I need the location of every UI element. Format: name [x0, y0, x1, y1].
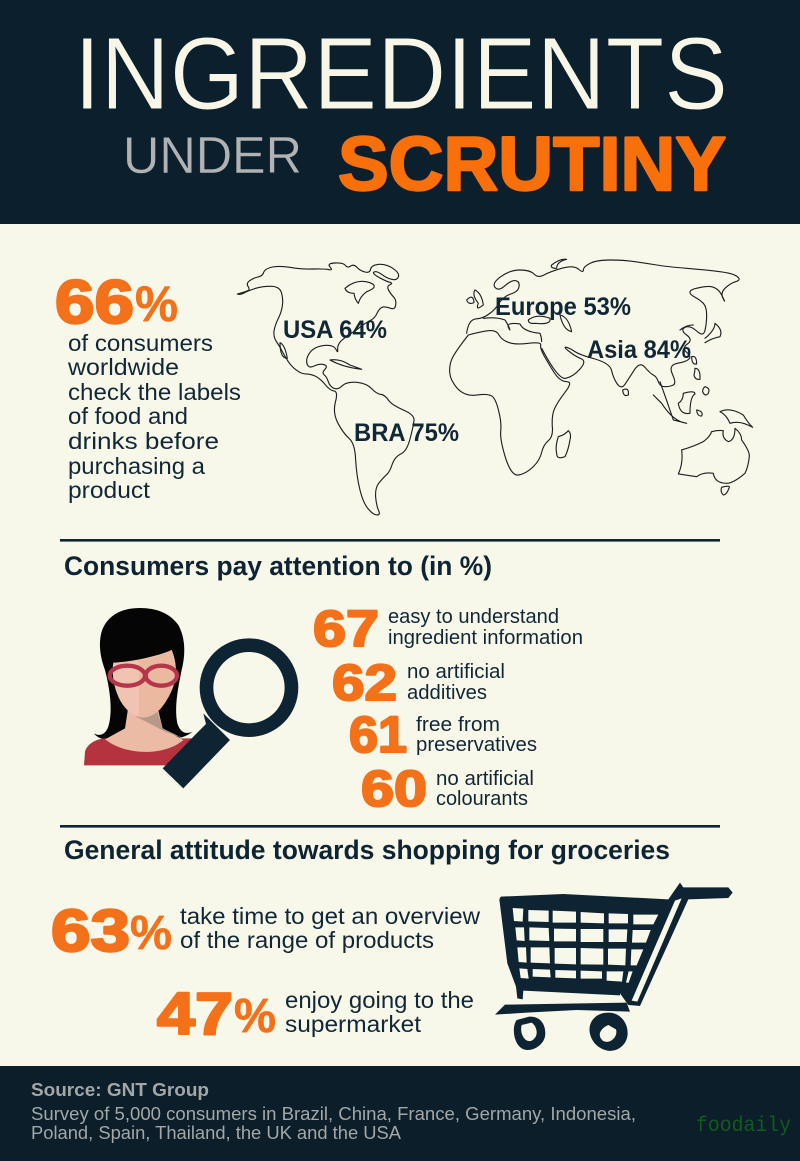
- stat: 63% take time: of the range of products: [180, 927, 434, 953]
- stat: 63% take time: take time to get an overview: [180, 903, 481, 929]
- neck shadow: [135, 712, 183, 738]
- stat 62: [332, 654, 505, 711]
- stat number 66%: 66: [55, 268, 134, 336]
- cart body: [499, 883, 733, 1006]
- section heading: consumers pay attention: Consumers pay attention to (in %): [64, 551, 492, 581]
- neck and chest: [105, 707, 183, 752]
- top: [84, 738, 194, 765]
- hair: [94, 608, 193, 740]
- stat 61: free from: [416, 713, 500, 736]
- stat 62: 62: [332, 654, 397, 711]
- stat: 63% take time: %: [130, 907, 172, 960]
- stat description: product: [68, 477, 150, 503]
- map: Europe, Asia, Africa, Australia: [450, 259, 753, 495]
- stat 60: no artificial: [436, 767, 534, 790]
- label: Europe 53%: Europe 53%: [495, 293, 631, 321]
- attention stats list: [313, 600, 583, 817]
- stat 61: 61: [349, 706, 407, 763]
- stat 60: [361, 760, 534, 817]
- stat description: purchasing a: [68, 453, 206, 479]
- stat description: of food and: [68, 403, 188, 429]
- stat: 47% enjoy: %: [234, 990, 276, 1043]
- stat 60: colourants: [436, 787, 528, 810]
- stat: 47% enjoy: enjoy going to the: [285, 987, 474, 1013]
- headline stat: 66% of consumers: [55, 268, 241, 503]
- survey note: Survey of 5,000 consumers in Brazil, China, France, Germany, Indonesia,: [31, 1104, 636, 1124]
- stat: 47% enjoy: [157, 981, 474, 1047]
- stat number 66%: [55, 268, 178, 336]
- cart grid holes: [513, 908, 658, 983]
- stat description: check the labels: [68, 379, 241, 405]
- stat: 47% enjoy: supermarket: [285, 1011, 421, 1037]
- stat description: [67, 330, 241, 503]
- survey note: Poland, Spain, Thailand, the UK and the USA: [31, 1123, 401, 1143]
- title: SCRUTINY: SCRUTINY: [338, 122, 726, 207]
- icon: shopping cart: [495, 883, 733, 1051]
- stat 61: preservatives: [416, 733, 537, 756]
- icon: woman with magnifying glass: [84, 608, 298, 788]
- label: USA 64%: USA 64%: [283, 316, 387, 344]
- source heading: Source: GNT Group: [31, 1079, 209, 1100]
- stat: 63% take time: [51, 898, 481, 964]
- label: Asia 84%: Asia 84%: [587, 336, 691, 364]
- section heading: general attitude: General attitude towards shopping for groceries: [64, 835, 670, 865]
- wheels: [514, 1017, 545, 1050]
- stat description: drinks before: [68, 428, 219, 454]
- survey note: [31, 1104, 636, 1143]
- glasses: [110, 666, 177, 686]
- stat description: worldwide: [67, 354, 179, 380]
- cart base: [495, 1003, 630, 1015]
- world map: [237, 259, 753, 515]
- stat number 66%: %: [135, 276, 178, 332]
- face: [113, 650, 176, 717]
- stat 67: easy to understand: [388, 605, 559, 628]
- stat 62: no artificial: [407, 660, 505, 683]
- stat: 63% take time: 63: [51, 898, 130, 964]
- stat 67: 67: [313, 600, 379, 657]
- stat 61: [349, 706, 537, 763]
- magnifying glass: [163, 638, 298, 788]
- stat: 47% enjoy: 47: [157, 981, 233, 1047]
- map: Americas: [237, 263, 414, 515]
- label: BRA 75%: BRA 75%: [354, 419, 459, 447]
- footer panel: [0, 1066, 800, 1161]
- header banner: [0, 0, 800, 224]
- title: UNDER: UNDER: [123, 127, 302, 185]
- stat 67: ingredient information: [388, 626, 583, 649]
- stat description: of consumers: [68, 330, 213, 356]
- title: INGREDIENTS: INGREDIENTS: [74, 16, 728, 131]
- watermark: foodaily: [696, 1115, 791, 1138]
- stat 62: additives: [407, 681, 487, 704]
- stat 60: 60: [361, 760, 427, 817]
- stat 67: [313, 600, 583, 657]
